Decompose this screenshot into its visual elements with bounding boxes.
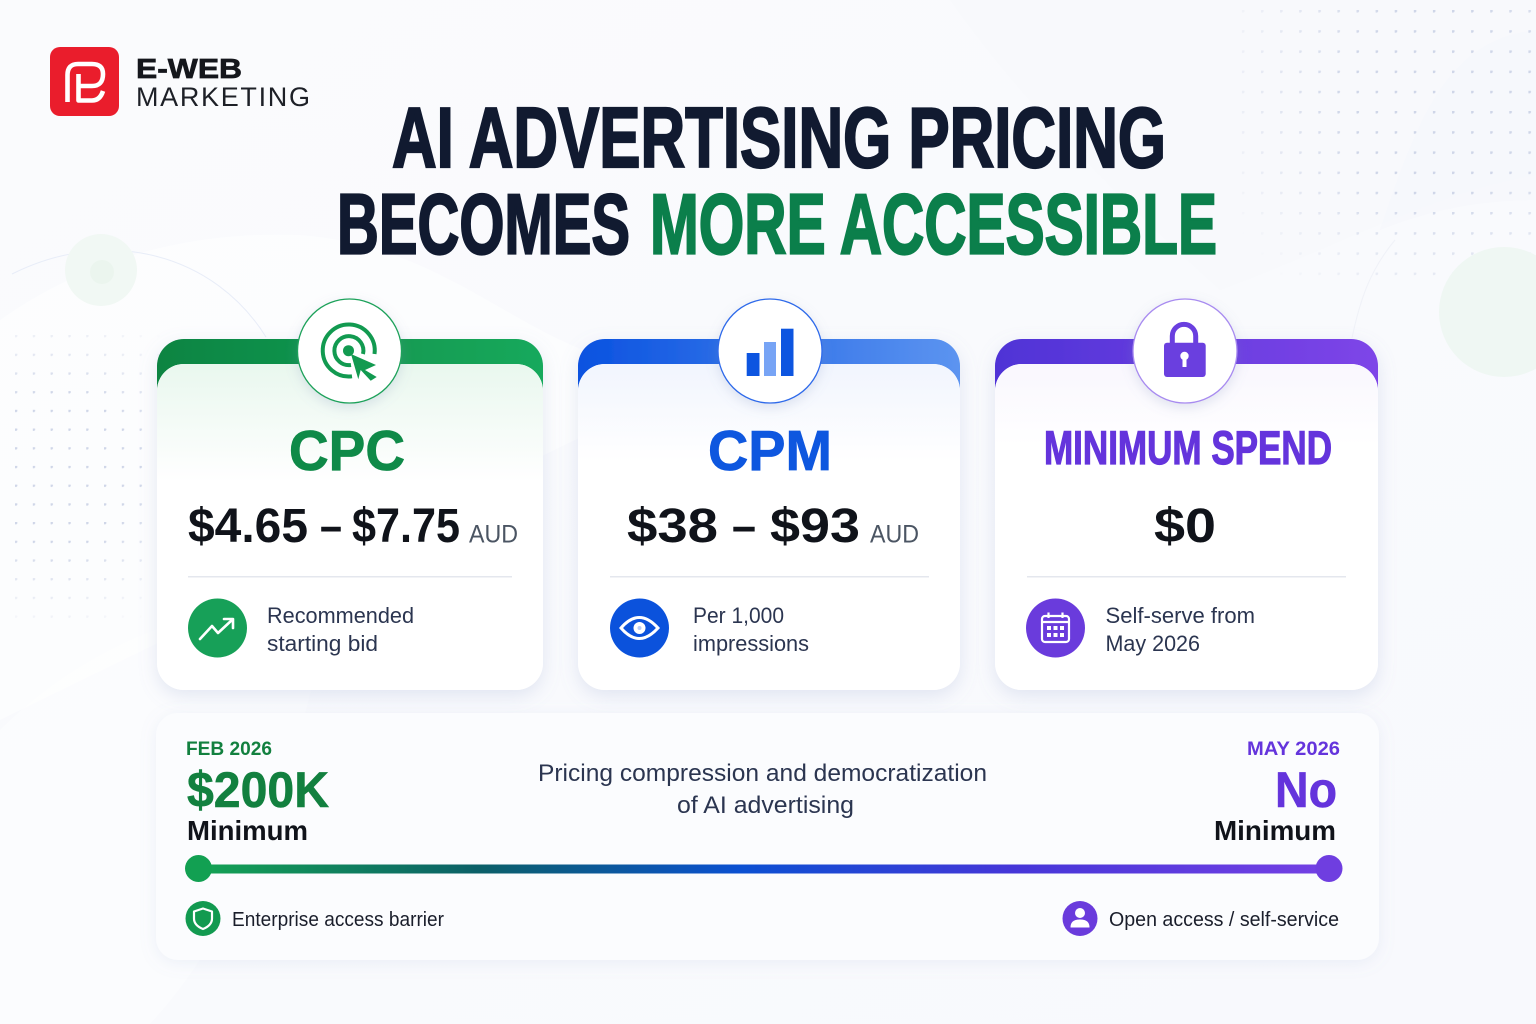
- logo wordmark: [136, 53, 310, 112]
- caption: pricing compression: [538, 760, 987, 819]
- price: CPM range: $93: [770, 500, 860, 553]
- heading: CPC: CPC: [289, 419, 405, 483]
- note: self-serve from May 2026: [1106, 603, 1255, 656]
- price: CPC range: –: [320, 500, 342, 553]
- title: MORE ACCESSIBLE: [650, 178, 1217, 272]
- note: recommended starting bid: [267, 603, 414, 656]
- panel: CPM card: [578, 299, 960, 690]
- price: CPM range: AUD: [870, 520, 919, 548]
- end: May 2026 no minimum: No: [1275, 762, 1337, 818]
- heading: CPM: CPM: [708, 419, 832, 483]
- end: May 2026 no minimum: [1214, 738, 1340, 846]
- icon: logo mark: [50, 47, 119, 116]
- start: Feb 2026 $200K minimum: [186, 738, 329, 846]
- panel: CPC card: [157, 299, 543, 690]
- caption: pricing compression: of AI advertising: [677, 792, 854, 819]
- note: per 1,000 impressions: Per 1,000: [693, 603, 784, 628]
- icon: person: [1062, 901, 1098, 936]
- icon: padlock: [1133, 299, 1237, 403]
- note: recommended starting bid: starting bid: [267, 631, 378, 656]
- icon: shield: [186, 901, 220, 936]
- icon: eye: [610, 598, 669, 658]
- icon: calendar: [1026, 598, 1085, 658]
- timeline bar: [185, 855, 1342, 882]
- logo: E-Web Marketing: [50, 47, 310, 116]
- price: CPC range: [188, 500, 518, 553]
- note: per 1,000 impressions: [693, 603, 809, 656]
- title: BECOMES: [337, 178, 630, 272]
- start: Feb 2026 $200K minimum: Minimum: [187, 815, 308, 846]
- logo wordmark: E-WEB: [136, 53, 242, 84]
- start: Feb 2026 $200K minimum: FEB 2026: [186, 738, 272, 760]
- note: per 1,000 impressions: impressions: [693, 631, 809, 656]
- price: CPM range: $38: [627, 500, 718, 553]
- panel: minimum spend card: [995, 299, 1378, 690]
- icon: bar chart: [718, 299, 822, 403]
- heading: minimum spend: MINIMUM SPEND: [1044, 421, 1332, 474]
- note: recommended starting bid: Recommended: [267, 603, 414, 628]
- end: May 2026 no minimum: MAY 2026: [1247, 738, 1340, 760]
- price: CPM range: –: [732, 500, 756, 553]
- title: [337, 91, 1217, 272]
- icon: trending arrow: [188, 598, 247, 658]
- price: CPC range: $7.75: [352, 500, 460, 553]
- title: AI ADVERTISING PRICING: [392, 91, 1166, 186]
- price: CPC range: $4.65: [188, 500, 308, 553]
- background decoration: [12, 10, 1536, 599]
- logo wordmark: MARKETING: [136, 82, 310, 112]
- start: Feb 2026 $200K minimum: $200K: [187, 762, 329, 818]
- price: CPC range: AUD: [469, 520, 518, 548]
- note: self-serve from May 2026: May 2026: [1106, 631, 1200, 656]
- label: open access / self-service: Open access / self-service: [1109, 909, 1339, 931]
- price: zero: $0: [1154, 500, 1216, 553]
- panel: timeline: [156, 713, 1379, 960]
- caption: pricing compression: Pricing compression and democratization: [538, 760, 987, 787]
- price: CPM range: [627, 500, 919, 553]
- note: self-serve from May 2026: Self-serve from: [1106, 603, 1255, 628]
- icon: target with cursor: [298, 299, 402, 403]
- label: enterprise access barrier: Enterprise access barrier: [232, 909, 444, 931]
- end: May 2026 no minimum: Minimum: [1214, 815, 1336, 846]
